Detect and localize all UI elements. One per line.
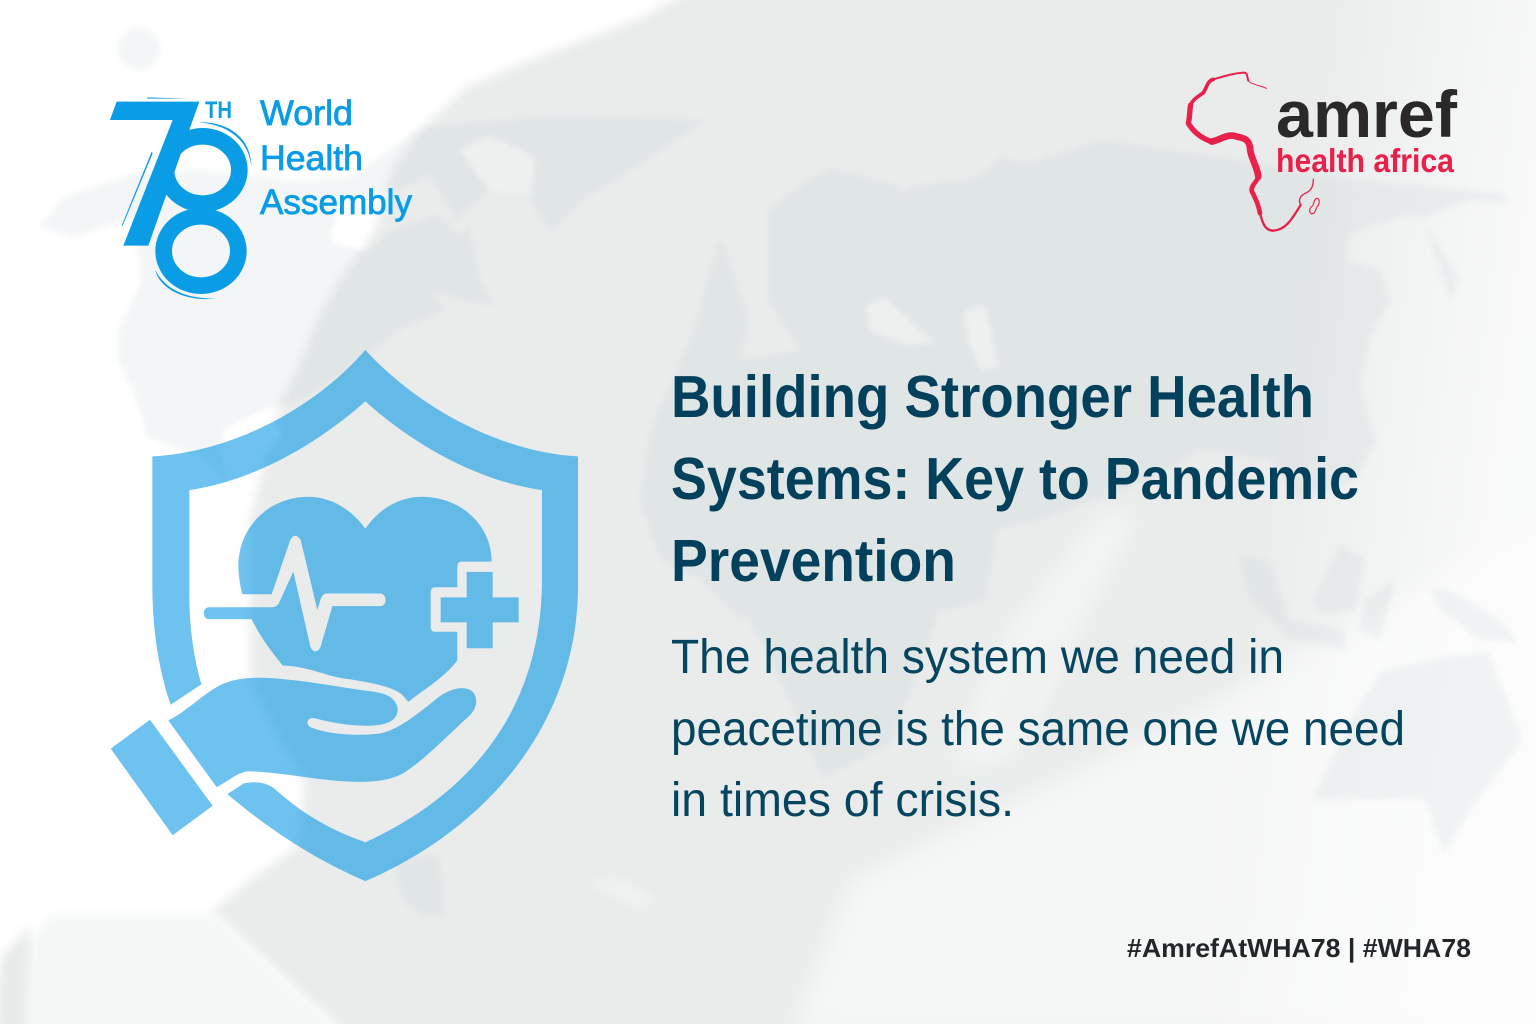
logo: amref health africa — [1188, 73, 1458, 231]
numerals 78 — [110, 97, 251, 299]
body text: The health system we need in — [671, 631, 1284, 684]
logo: 78th World Health Assembly: World — [260, 94, 353, 133]
logo: 78th World Health Assembly: TH — [205, 97, 232, 124]
heart — [238, 497, 492, 702]
hand — [168, 678, 476, 787]
hashtags: #AmrefAtWHA78 | #WHA78 — [1127, 933, 1471, 963]
medical cross — [441, 572, 519, 648]
cuff — [111, 720, 213, 835]
logo: 78th World Health Assembly: Assembly — [260, 183, 412, 222]
title — [671, 364, 1359, 594]
title: Prevention — [671, 528, 956, 594]
africa outline — [1188, 73, 1319, 231]
body text: in times of crisis. — [671, 774, 1014, 827]
logo: amref health africa: health africa — [1276, 142, 1455, 179]
logo: amref health africa: amref — [1276, 77, 1458, 151]
body text — [671, 631, 1405, 827]
title: Building Stronger Health — [671, 364, 1314, 430]
title: Systems: Key to Pandemic — [671, 446, 1359, 512]
logo: 78th World Health Assembly — [110, 94, 412, 299]
icon: shield with heart, ECG line, medical cross and caring hand — [111, 350, 578, 881]
body text: peacetime is the same one we need — [671, 703, 1405, 756]
ECG line stub — [204, 607, 257, 619]
logo: 78th World Health Assembly: Health — [260, 139, 363, 178]
shield — [152, 350, 578, 881]
